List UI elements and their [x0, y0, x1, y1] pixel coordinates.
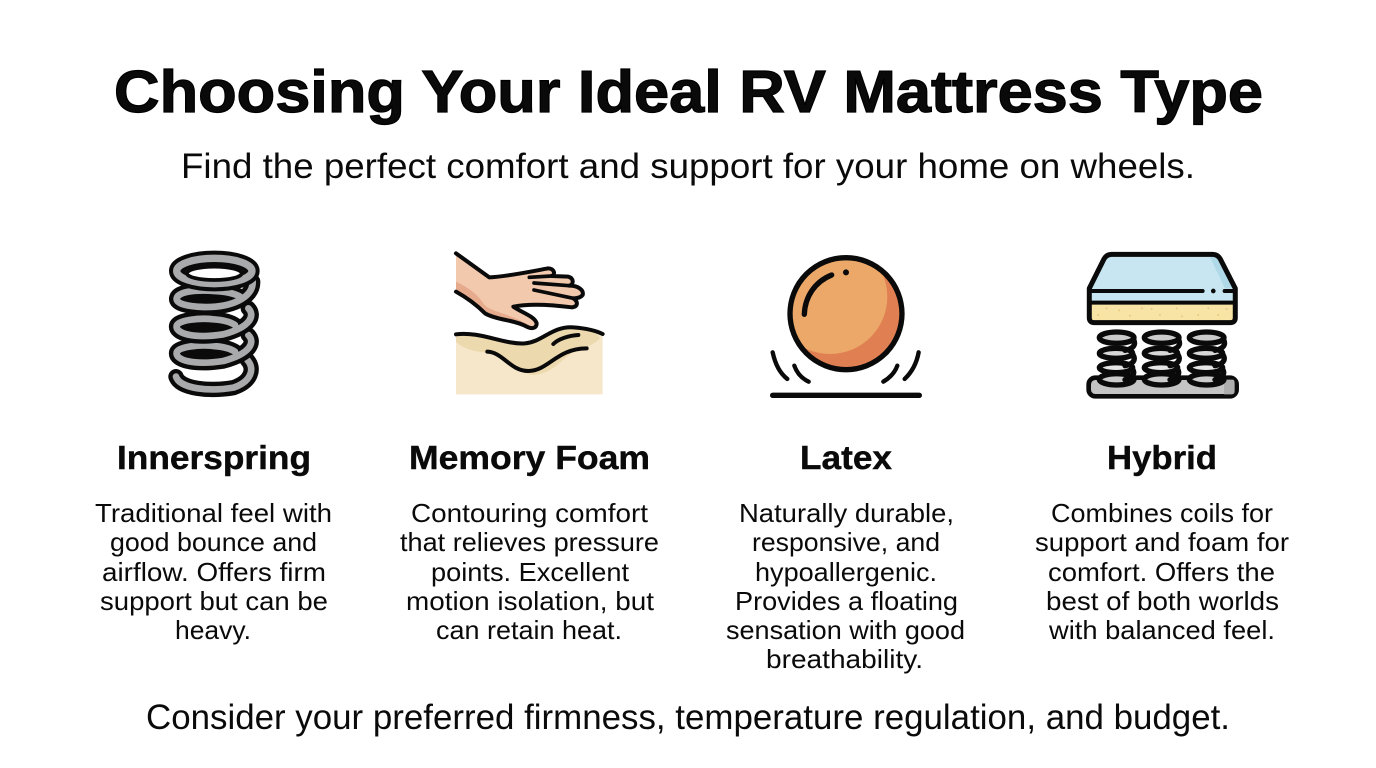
description: Memory Foam: motion isolation, but [406, 586, 655, 616]
description: Memory Foam: can retain heat. [436, 615, 622, 645]
description: Hybrid: Combines coils for [1051, 498, 1273, 528]
heading: Memory Foam: Memory Foam [409, 439, 650, 476]
panel: innerspring [95, 258, 332, 645]
description: Hybrid: support and foam for [1035, 527, 1289, 557]
description: Hybrid: comfort. Offers the [1048, 557, 1275, 587]
description: Hybrid [1035, 498, 1289, 645]
closing note: Consider your preferred firmness, temperature regulation, and budget. [146, 698, 1230, 737]
heading: Innerspring: Innerspring [117, 439, 311, 476]
description: Memory Foam: points. Excellent [431, 557, 630, 587]
description: Innerspring: support but can be [100, 586, 328, 616]
heading: Hybrid: Hybrid [1107, 439, 1217, 476]
subtitle: Find the perfect comfort and support for your home on wheels. [181, 147, 1195, 186]
panel: hybrid [1035, 254, 1289, 645]
description: Latex: sensation with good [726, 615, 965, 645]
panel: memory foam [400, 253, 659, 645]
description: Hybrid: with balanced feel. [1048, 615, 1275, 645]
description: Latex: hypoallergenic. [755, 557, 937, 587]
description: Innerspring: airflow. Offers firm [102, 557, 326, 587]
description: Latex: responsive, and [752, 527, 940, 557]
description: Latex: breathability. [766, 644, 923, 674]
heading: Latex: Latex [800, 439, 893, 476]
description: Memory Foam: that relieves pressure [400, 527, 659, 557]
description: Latex [726, 498, 965, 674]
description: Latex: Provides a floating [735, 586, 958, 616]
description: Innerspring: good bounce and [110, 527, 317, 557]
description: Innerspring [95, 498, 332, 645]
description: Memory Foam [400, 498, 659, 645]
title: Choosing Your Ideal RV Mattress Type [114, 59, 1263, 125]
description: Hybrid: best of both worlds [1046, 586, 1279, 616]
description: Innerspring: heavy. [175, 615, 251, 645]
description: Latex: Naturally durable, [739, 498, 954, 528]
description: Memory Foam: Contouring comfort [411, 498, 649, 528]
icon: hand pressing foam [456, 253, 603, 394]
icon: coil spring [176, 258, 253, 389]
description: Innerspring: Traditional feel with [95, 498, 332, 528]
icon: bouncing latex ball [773, 239, 919, 395]
panel: latex [726, 239, 965, 674]
icon: hybrid mattress on coils [1089, 254, 1237, 396]
